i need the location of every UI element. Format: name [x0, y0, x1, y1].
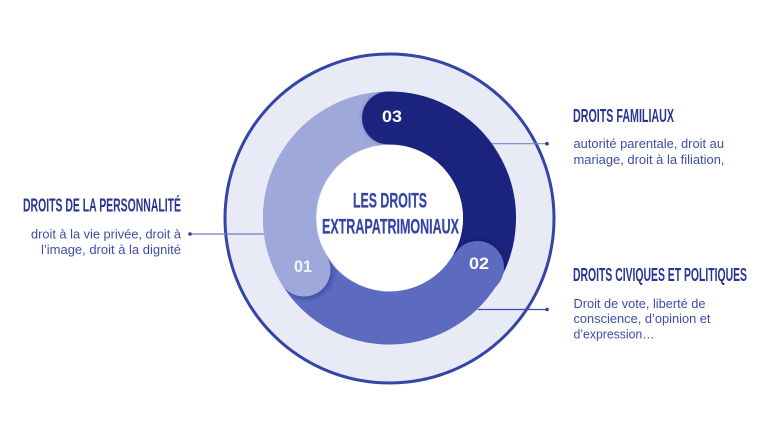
- text block: droits civiques et politiques: conscience, d’opinion et: [574, 312, 711, 326]
- center title: LES DROITS: [353, 190, 427, 212]
- segment 01 overlap arc: [289, 131, 340, 271]
- text block: droits familiaux: DROITS FAMILIAUX: [573, 106, 674, 126]
- text block: droits de la personnalité: l’image, droit à la dignité: [41, 243, 181, 257]
- number 02: 02: [469, 254, 489, 273]
- segment 02 shadow: [450, 240, 504, 294]
- text block: droits de la personnalité: DROITS DE LA PERSONNALITÉ: [23, 194, 181, 216]
- connector lines: [188, 142, 549, 311]
- infographic: [24, 52, 747, 384]
- text block: droits familiaux: autorité parentale, droit au: [574, 137, 724, 151]
- segment 01 cap: [278, 244, 330, 296]
- text block: droits civiques et politiques: [573, 265, 747, 342]
- segment 01 shadow: [279, 245, 333, 299]
- number 03: 03: [382, 107, 402, 126]
- segment 03 cap: [362, 92, 415, 144]
- text block: droits familiaux: [573, 106, 724, 167]
- segment 03 arc: [388, 118, 490, 267]
- number 01: 01: [294, 257, 312, 276]
- text block: droits civiques et politiques: Droit de vote, liberté de: [574, 297, 706, 311]
- text block: droits civiques et politiques: d’expression…: [574, 328, 654, 342]
- text block: droits familiaux: mariage, droit à la filiation,: [574, 153, 724, 167]
- segment 02 arc: [304, 267, 477, 318]
- center title: EXTRAPATRIMONIAUX: [322, 216, 459, 238]
- text block: droits de la personnalité: droit à la vie privée, droit à: [31, 228, 181, 242]
- center title: [322, 190, 459, 238]
- outer circle: [225, 54, 554, 383]
- segment 02 cap: [451, 241, 504, 294]
- segment 03 shadow: [360, 92, 399, 146]
- donut chart: [278, 92, 504, 318]
- text block: droits de la personnalité: [23, 194, 181, 257]
- center circle: [317, 145, 463, 291]
- segment 01 arc: [289, 118, 392, 271]
